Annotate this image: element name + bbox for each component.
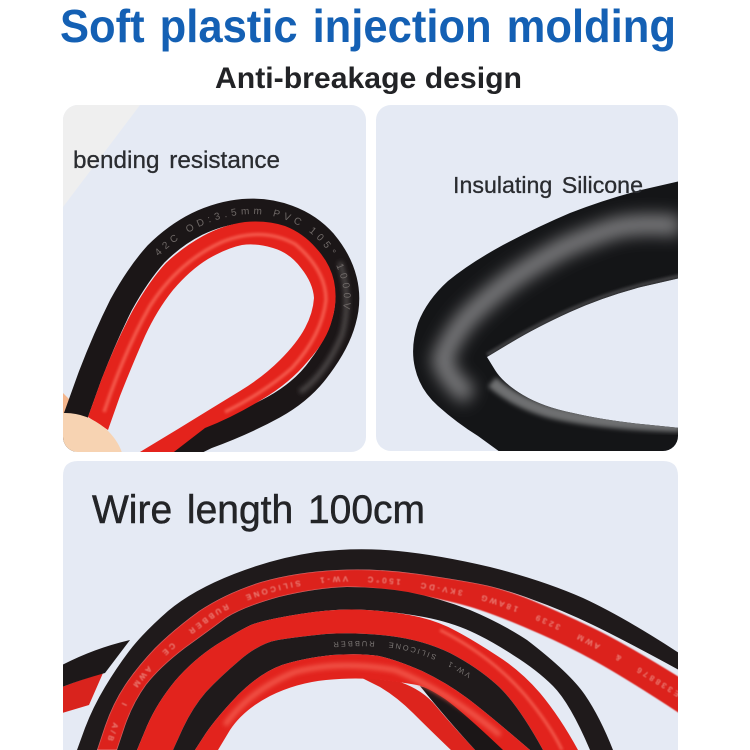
black wire loop: 42C OD:3.5mm PVC 105° 1000V bbox=[156, 208, 351, 310]
panel: insulating silicone bbox=[376, 105, 680, 452]
outer black wire bbox=[77, 549, 679, 750]
black silicone tube bbox=[413, 181, 680, 452]
inner black wire: VW-1 SILICONE RUBBER bbox=[334, 641, 470, 678]
back wire left bbox=[62, 640, 130, 713]
panel: bending resistance bbox=[63, 105, 366, 452]
outer red wire: E338876 & AWM 3239 18AWG 3KV-DC 150°C VW-1 SILICONE RUBBER CE AWM I A/B bbox=[108, 576, 678, 742]
red wire loop bbox=[88, 222, 336, 455]
fingertip bbox=[63, 413, 122, 453]
black wire loop bbox=[63, 198, 360, 452]
finger behind cable bbox=[63, 393, 69, 413]
middle red wire bbox=[137, 610, 578, 750]
heading: wire length: Wire length 100cm bbox=[92, 488, 425, 532]
inner red wire bbox=[195, 654, 530, 750]
inner black wire bbox=[173, 633, 543, 750]
middle black wire bbox=[117, 587, 613, 750]
panel: wire length bbox=[63, 461, 678, 750]
label: bending resistance: bending resistance bbox=[73, 147, 280, 174]
subtitle: Anti-breakage design bbox=[215, 62, 522, 95]
title: Soft plastic injection molding bbox=[60, 0, 676, 52]
label: insulating silicone: Insulating Silicone bbox=[453, 172, 643, 198]
back wires centre bbox=[360, 677, 510, 750]
